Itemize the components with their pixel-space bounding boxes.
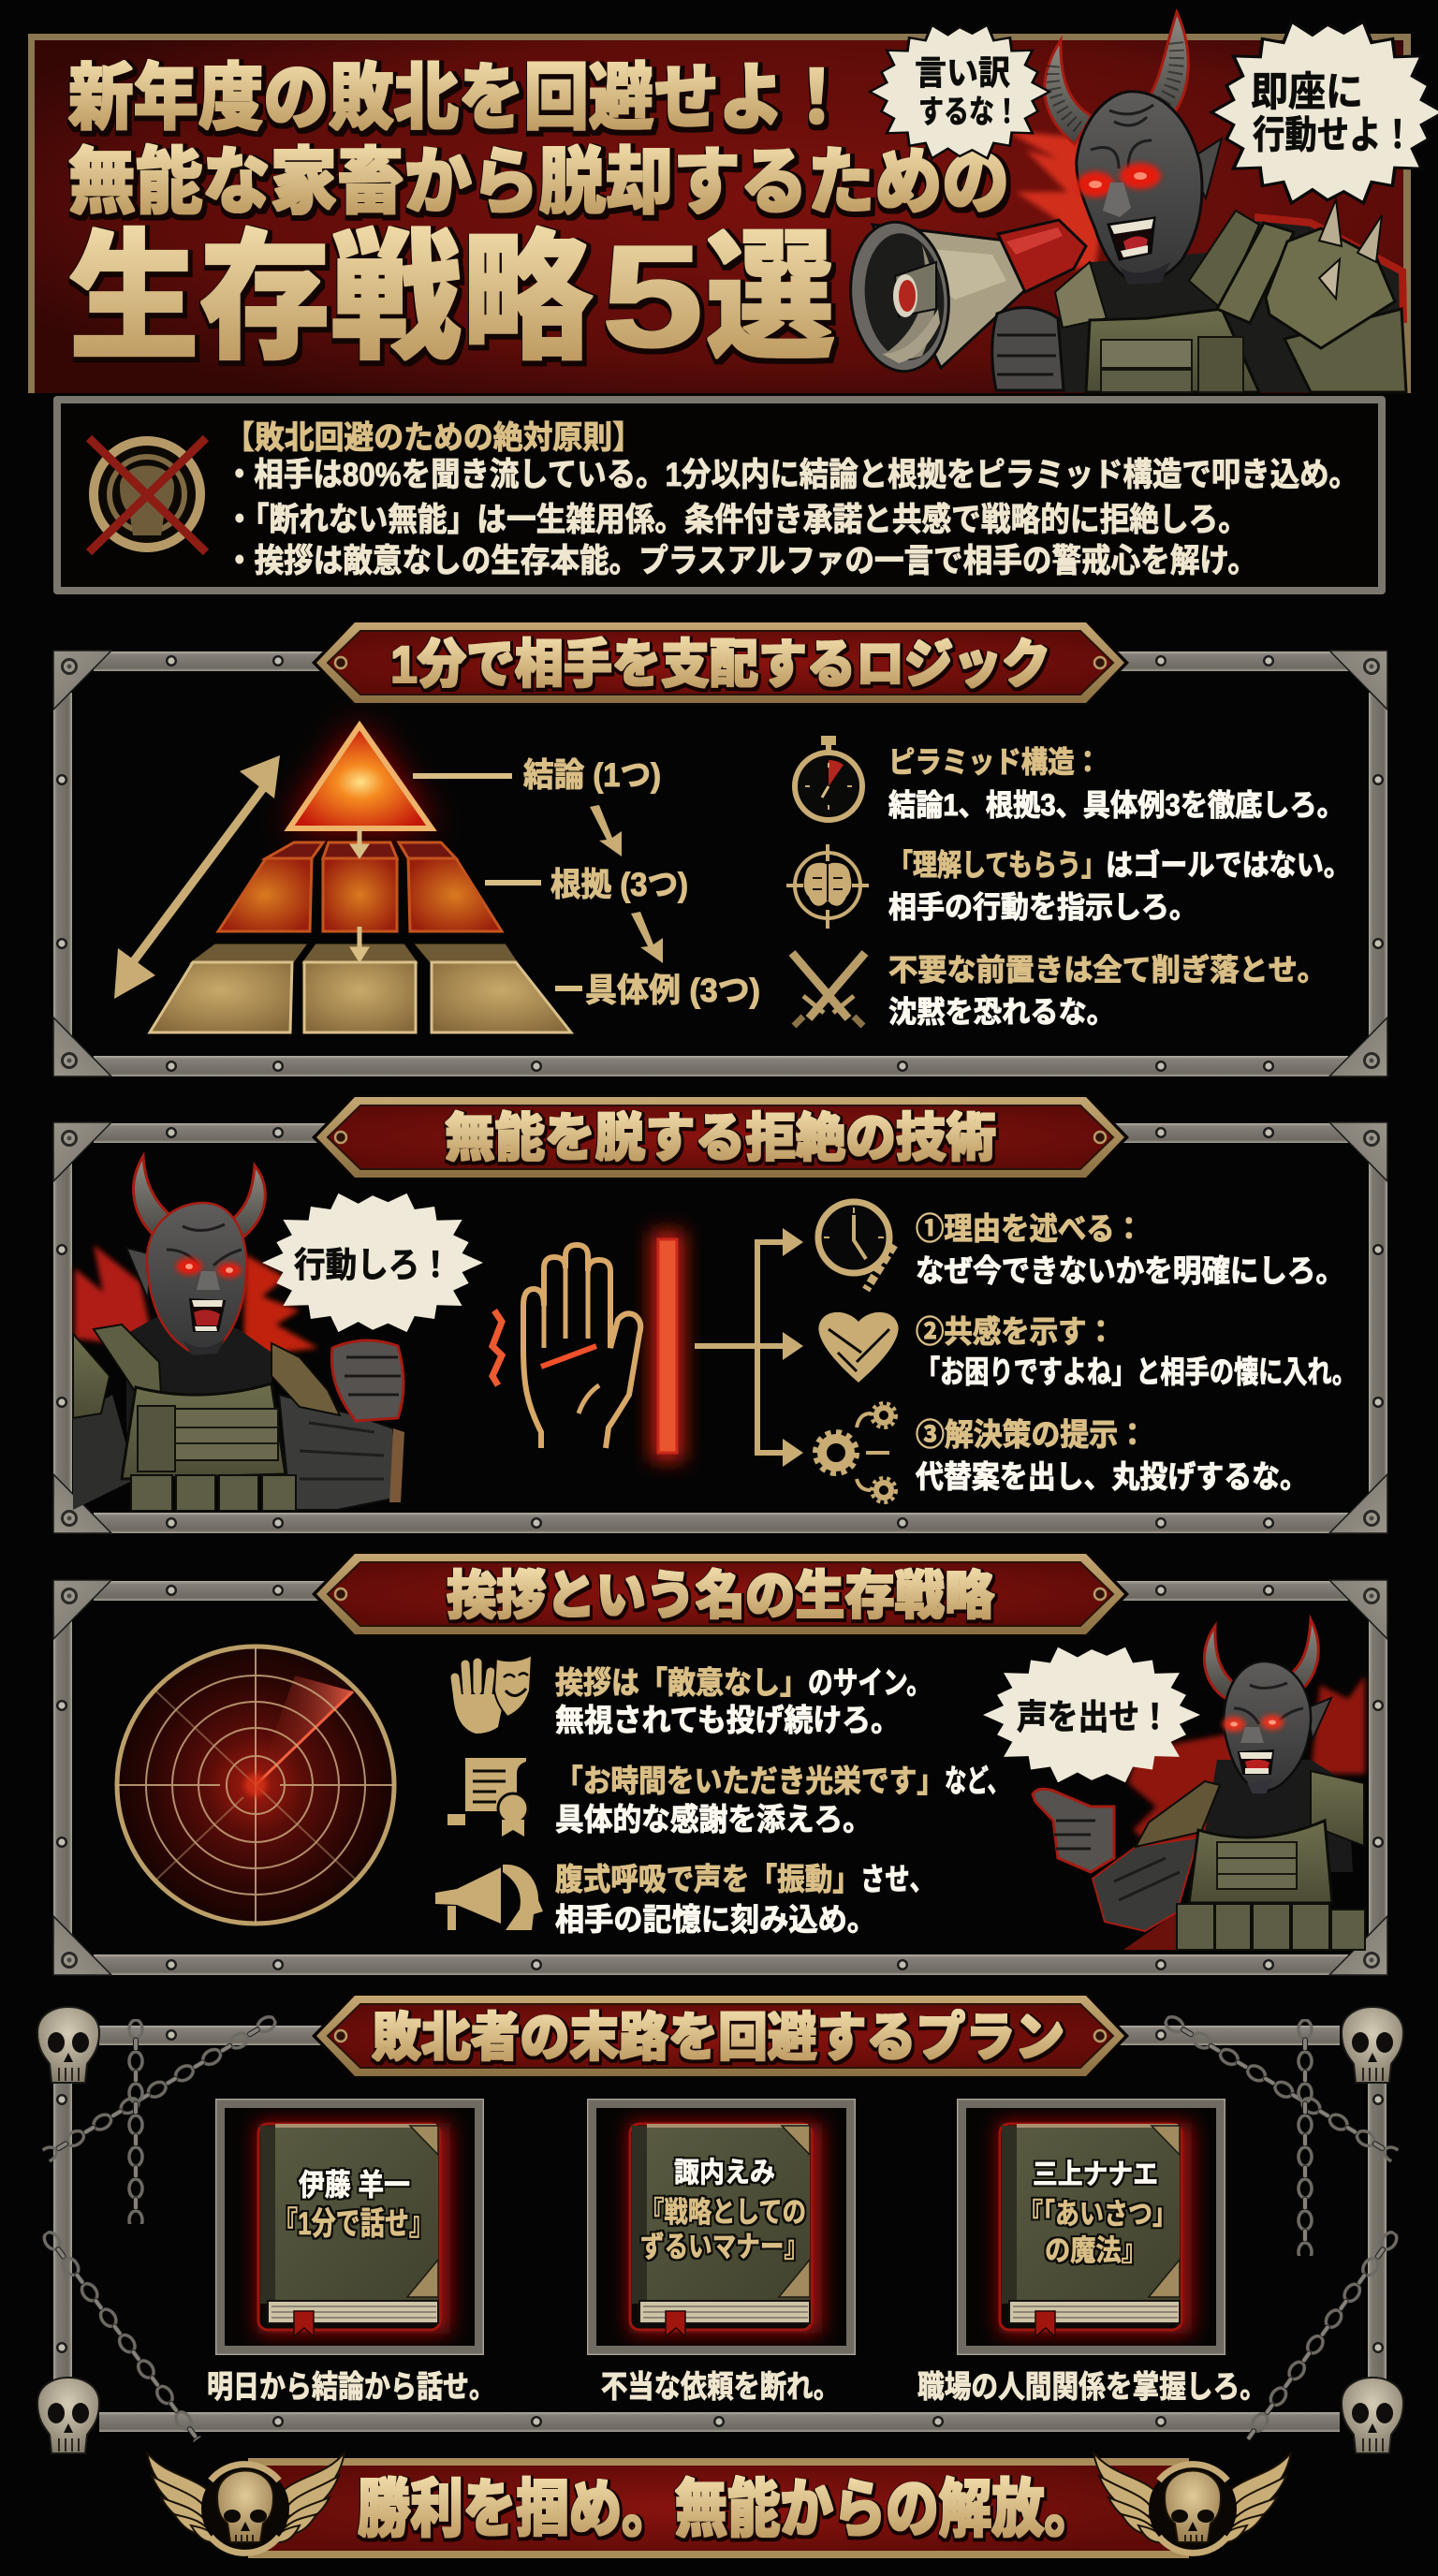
decorative chains [39,2012,1401,2444]
arrow: vertical flow [350,828,369,962]
tips text: 挨拶は「敵意なし」 [555,1665,808,1700]
reasons text: ①理由を述べる： [916,1211,1143,1246]
title: 生存戦略 [68,219,593,376]
pyramid diagram [150,725,571,1032]
explanation text: 相手の行動を指示しろ。 [888,890,1197,924]
icon: megaphone and head [435,1865,543,1930]
skulls at corners [37,2007,1403,2453]
pyramid labels: 根拠 (3つ) [550,867,688,903]
closing banner [147,2452,1291,2558]
principles text: ・挨拶は敵意なしの生存本能。プラスアルファの一言で相手の警戒心を解け。 [225,543,1257,579]
tips text [555,1665,1009,1937]
speech bubble: 即座に行動せよ [1211,22,1438,203]
icon: crossed swords [792,953,865,1026]
icon: stopwatch [795,736,862,820]
reasons text [916,1211,1357,1494]
pyramid labels [413,757,760,1009]
section banner [312,621,1129,705]
book 2 [587,2099,856,2355]
speech bubble: 即座に行動せよ: 即座に [1251,70,1363,115]
panel: refusal technique [53,1095,1387,1533]
book 2: ずるいマナー』 [640,2231,808,2263]
icon: clock with chain [818,1202,894,1290]
radar chart [117,1647,394,1924]
principles text [225,420,1358,579]
explanation text: 結論1、根拠3、具体例3を徹底しろ。 [888,788,1344,822]
icon: handshake heart [818,1312,899,1383]
pyramid labels: 具体例 (3つ) [585,973,760,1009]
section banner: 挨拶という名の生存戦略 [447,1566,994,1625]
tips text: 具体的な感謝を添えろ。 [555,1802,872,1837]
icon: scroll with seal [448,1758,528,1837]
reasons text: なぜ今できないかを明確にしろ。 [916,1253,1344,1288]
section banner: 無能を脱する拒絶の技術 [445,1108,996,1167]
book captions: 職場の人間関係を掌握しろ。 [917,2369,1267,2404]
panel: header [28,12,1438,393]
book captions: 明日から結論から話せ。 [207,2369,495,2404]
character: shouting demon with megaphone [844,12,1406,392]
book 3: の魔法』 [1045,2234,1147,2267]
book 3 [957,2099,1225,2355]
title: 新年度の敗北を回避せよ！ [68,56,849,139]
speech bubble: 言い訳するな: 言い訳 [915,53,1010,92]
section banner: 敗北者の末路を回避するプラン [372,2008,1064,2067]
character: demon with raised fist [73,1156,404,1511]
book captions [207,2369,1267,2404]
pyramid labels: 結論 (1つ) [523,757,661,794]
speech bubble: 声を出せ: 声を出せ！ [1017,1698,1170,1736]
icon: crossed-out skull [89,438,206,552]
explanation text: 不要な前置きは全て削ぎ落とせ。 [888,953,1327,987]
explanation text [888,745,1351,1029]
arrow: double headed diagonal [114,755,280,999]
book 2: 諏内えみ [674,2158,775,2188]
panel: plan to avoid defeat [37,1994,1403,2453]
tips text: 腹式呼吸で声を「振動」 [555,1862,860,1896]
tips text: のサイン。 [808,1665,932,1700]
arrows: branching to three reasons [695,1228,803,1467]
explanation text: 沈黙を恐れるな。 [888,995,1115,1029]
reasons text: ③解決策の提示： [916,1417,1147,1452]
icon: stop hand with barrier [492,1231,684,1461]
tips text: など、 [945,1764,1009,1798]
speech bubble: 声を出せ [983,1647,1200,1782]
tips text: させ、 [860,1862,934,1896]
title: 無能な家畜から脱却するための [68,140,1009,223]
icon: winged skull left [147,2452,345,2553]
speech bubble: 言い訳するな [870,25,1049,158]
explanation text: 「理解してもらう」 [888,848,1106,882]
principles text: 【敗北回避のための絶対原則】 [225,420,642,456]
speech bubble: 行動しろ: 行動しろ！ [294,1246,451,1284]
icon: winged skull right [1093,2452,1291,2553]
book captions: 不当な依頼を断れ。 [601,2369,840,2404]
icon: gears and arrows [815,1403,896,1502]
book 1: 伊藤 羊一 [299,2168,410,2202]
reasons text: ②共感を示す： [916,1314,1115,1349]
tips text: 相手の記憶に刻み込め。 [555,1902,876,1937]
book 3: 『「あいさつ」 [1019,2198,1177,2231]
principles text: ・「断れない無能」は一生雑用係。条件付き承諾と共感で戦略的に拒絶しろ。 [225,502,1248,538]
panel: absolute principles [53,396,1386,594]
speech bubble: 行動しろ [262,1193,483,1332]
title: 5 [601,215,704,377]
reasons text: 代替案を出し、丸投げするな。 [916,1459,1308,1494]
explanation text: はゴールではない。 [1106,848,1351,882]
speech bubble: 言い訳するな: するな！ [918,95,1020,130]
icon: brain with reticle [786,844,869,929]
character: pointing demon [1033,1619,1365,1950]
book 1: 『1分で話せ』 [273,2206,433,2242]
icon: waving hand and comedy mask [453,1655,532,1734]
book 1 [215,2099,484,2355]
panel: greeting survival strategy [53,1552,1387,1975]
section banner [312,1552,1129,1636]
tips text: 無視されても投げ続けろ。 [555,1703,900,1737]
tips text: 「お時間をいただき光栄です」 [555,1764,945,1798]
book 3: 三上ナナエ [1033,2159,1158,2190]
book 2: 『戦略としての [640,2196,806,2229]
section banner [312,1095,1129,1179]
arrows: labels step down [590,805,663,963]
closing banner: 勝利を掴め。無能からの解放。 [358,2474,1097,2545]
section banner [312,1994,1129,2078]
title [68,56,1009,377]
panel: 1-minute logic [53,621,1387,1076]
title: 選 [706,219,835,376]
section banner: 1分で相手を支配するロジック [390,635,1050,694]
explanation text: ピラミッド構造： [888,745,1101,779]
